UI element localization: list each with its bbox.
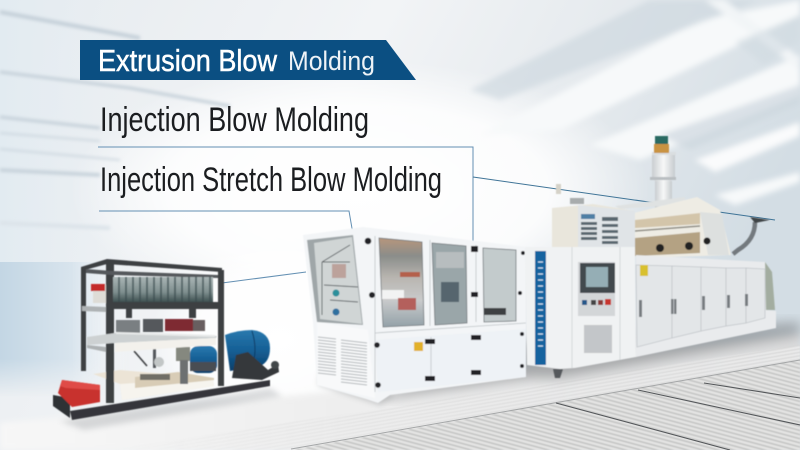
lower line body: [636, 255, 776, 357]
connector lines: [98, 147, 775, 283]
side louvers: [318, 337, 367, 385]
right cabinet doors: [636, 265, 765, 347]
base rail: [70, 380, 270, 420]
tower: [615, 136, 685, 212]
bottles row: [91, 277, 213, 303]
blue status strip: [535, 251, 546, 365]
front windows: [379, 238, 424, 327]
red box: [58, 380, 100, 407]
banner title: Extrusion Blow: [98, 43, 278, 78]
yellow switch: [414, 342, 423, 351]
rack frame: [81, 259, 224, 403]
extruder body: [634, 197, 770, 258]
shelf: [82, 306, 106, 312]
top control box: [552, 198, 635, 251]
hinges and latches: [365, 238, 525, 388]
mechanism: [134, 346, 279, 384]
banner subtitle: Molding: [288, 46, 375, 76]
heading: injection blow molding: Injection Blow Molding: [100, 101, 369, 139]
vent: [584, 325, 612, 353]
touch screen panel: [578, 262, 615, 316]
lower tray: [93, 370, 214, 400]
door seams: [375, 236, 526, 392]
banner: [80, 40, 416, 80]
machine: injection blow cabinet (centre): [303, 227, 526, 403]
machine: extrusion rack (left): [53, 259, 279, 420]
foot: [553, 369, 563, 378]
mid shelf: [87, 319, 217, 352]
control cabinet: [525, 247, 636, 369]
sensor post: [556, 184, 561, 194]
side window: [307, 235, 363, 325]
heading: injection stretch blow molding: Injection Stretch Blow Molding: [100, 161, 442, 199]
door handles: [639, 294, 748, 317]
blue cylinders: [190, 330, 270, 373]
background plant: [765, 262, 775, 310]
floor: [0, 322, 800, 450]
machine: injection stretch line (right): [525, 136, 776, 378]
